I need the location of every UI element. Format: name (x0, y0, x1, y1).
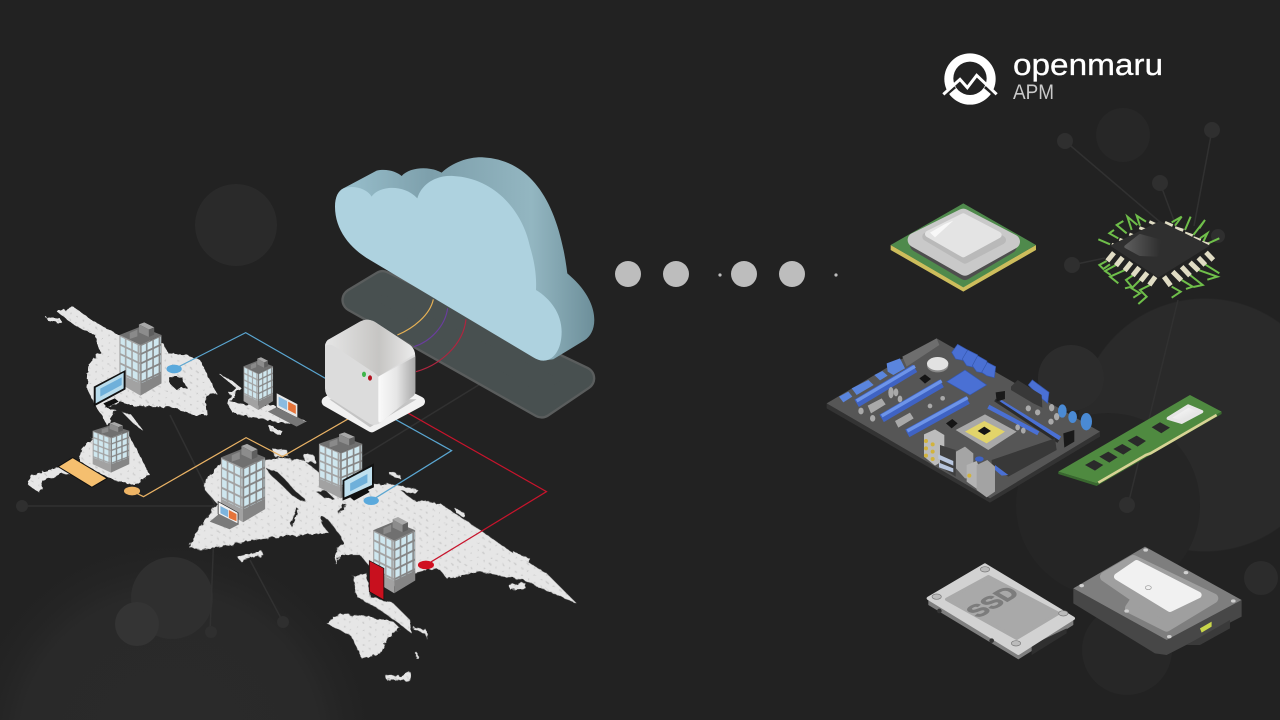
map landmasses (28, 307, 577, 680)
building and tablet: south america (58, 422, 129, 487)
expansion slots (857, 366, 1060, 442)
logo wordmark: openmaru (1013, 48, 1163, 82)
server top face (325, 320, 415, 377)
capacitors (1058, 404, 1092, 430)
heat sinks (947, 344, 1049, 403)
green traces (1098, 216, 1219, 304)
black ICs (919, 374, 931, 384)
curved data links to the cloud (397, 299, 466, 372)
long heat block (992, 438, 1057, 477)
SSD drive (928, 565, 1073, 659)
cloud (335, 157, 594, 361)
yellow connector (1200, 622, 1212, 633)
QFP microchip (1098, 216, 1219, 304)
ellipsis dots (615, 261, 838, 287)
SSD label: SSD (960, 583, 1026, 621)
building and monitor: north america west (94, 322, 161, 407)
world map with offices (28, 307, 577, 680)
building and laptop: africa (210, 444, 265, 529)
product name: APM (1013, 81, 1054, 104)
small headers (839, 358, 905, 402)
screws (932, 567, 1068, 646)
RAM module (1058, 395, 1222, 486)
building and phone: asia (369, 517, 415, 600)
HDD screws (1079, 548, 1236, 638)
rear IO ports (924, 429, 995, 497)
status LEDs (362, 372, 372, 381)
CPU processor (891, 203, 1036, 292)
RAM clips (996, 391, 1074, 448)
chip body (1110, 221, 1210, 278)
logo mark (940, 53, 1000, 105)
building and monitor: europe (319, 432, 374, 501)
server body (325, 320, 415, 425)
CPU socket (956, 414, 1017, 450)
connection lines (132, 333, 546, 565)
cloud platform shadow (354, 283, 583, 406)
upper pins (1112, 222, 1209, 247)
pins (1107, 252, 1213, 286)
server box (325, 320, 420, 427)
motherboard (827, 338, 1100, 503)
building and laptop: north america east (244, 357, 306, 427)
hard disk drive (1073, 547, 1242, 655)
connection end dots (124, 365, 434, 569)
grey connectors (858, 387, 1059, 434)
server right face (378, 357, 415, 422)
battery (927, 359, 948, 372)
rear connector strip (902, 338, 939, 367)
openmaru APM logo (940, 48, 1163, 105)
server base (327, 377, 420, 427)
dark chipset block (1011, 380, 1042, 408)
